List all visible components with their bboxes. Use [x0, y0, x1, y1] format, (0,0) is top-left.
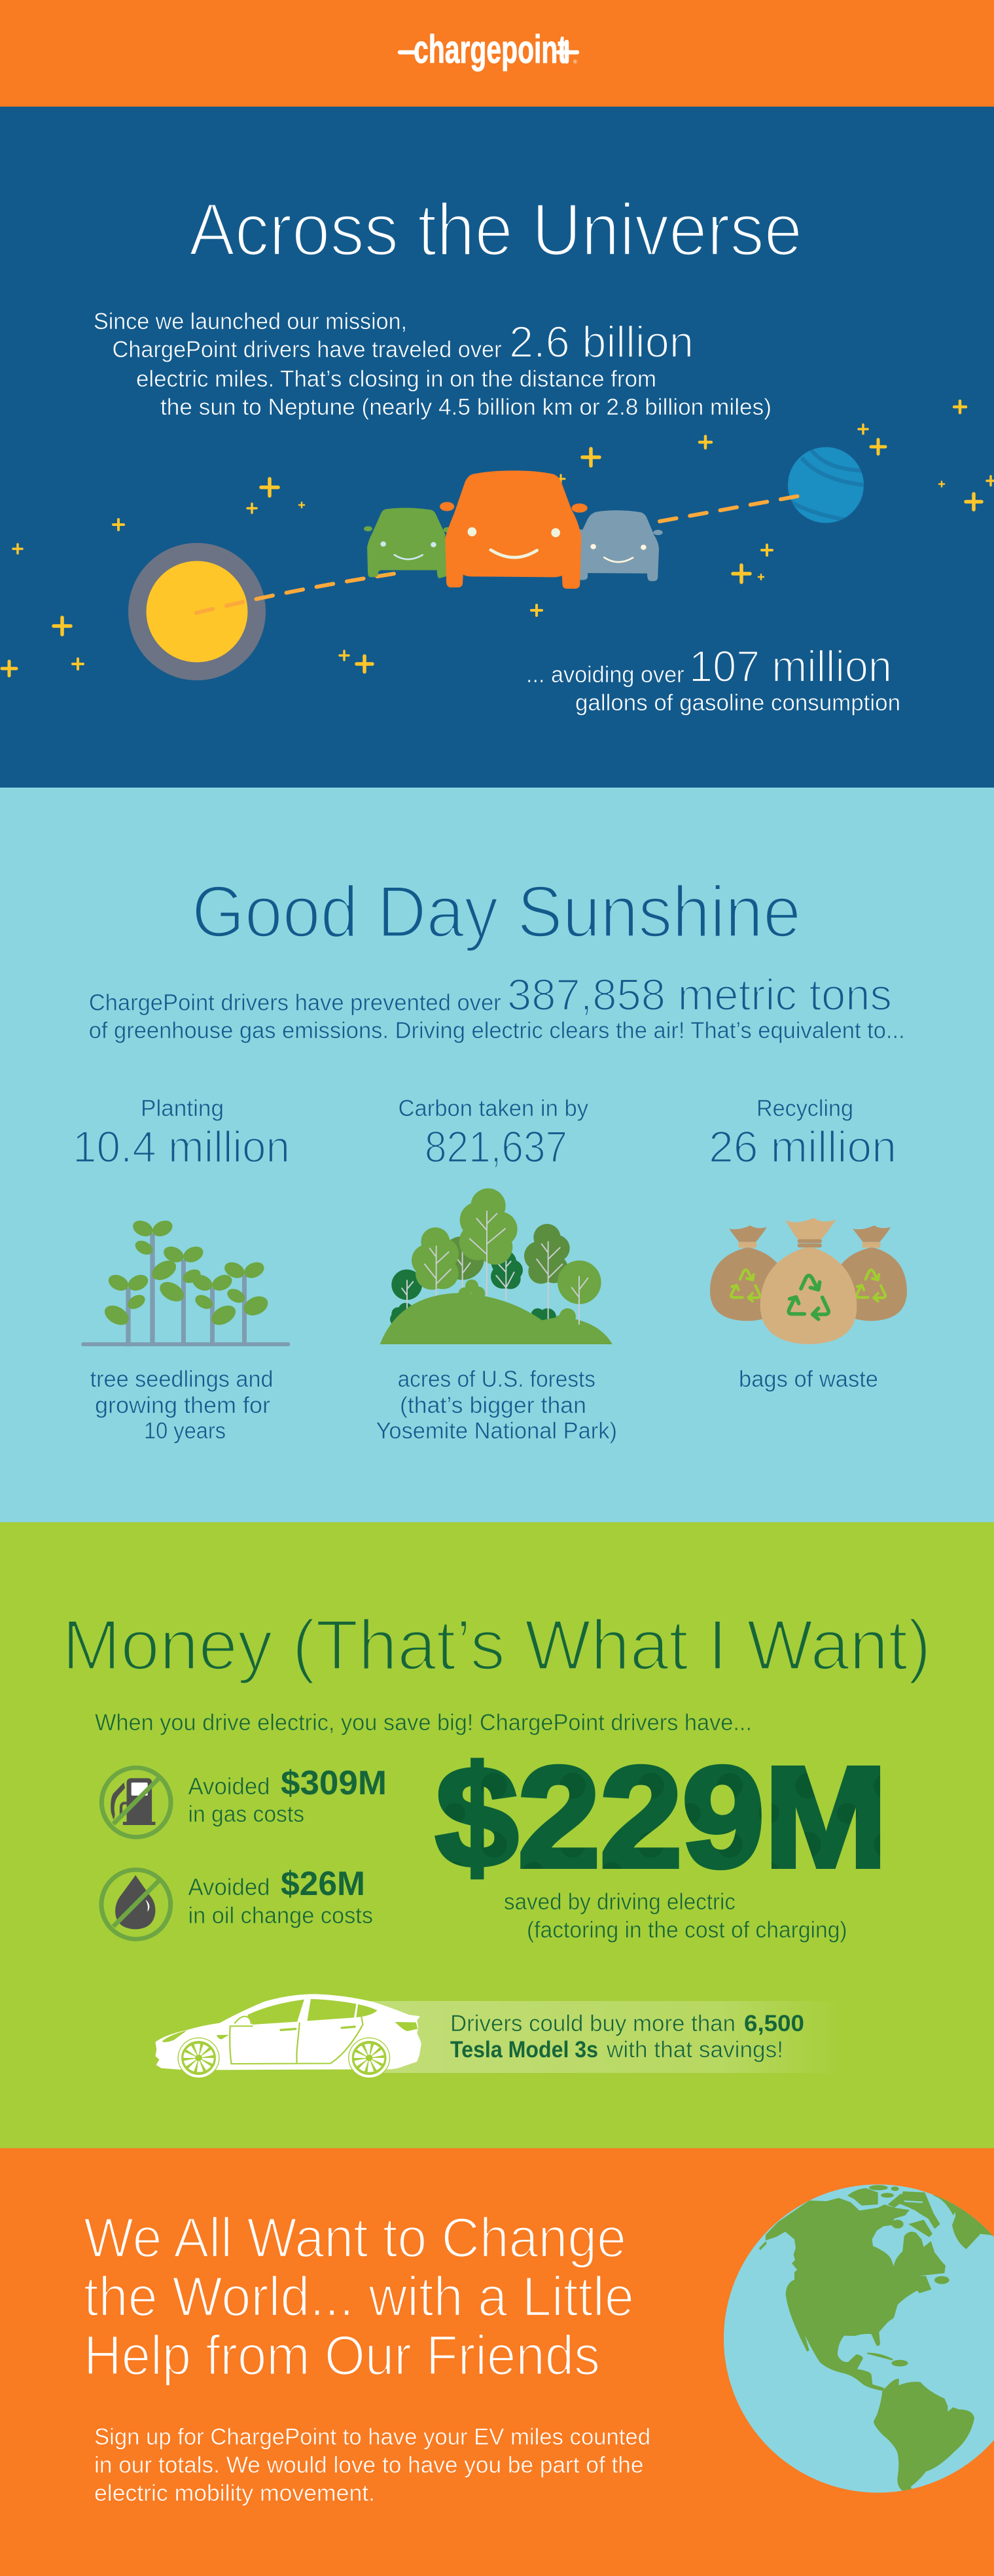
icon: recycling bags	[710, 1218, 907, 1344]
text block: emissions prevented: 387,858 metric tons	[507, 970, 892, 1020]
stat: carbon: Carbon taken in by	[398, 1096, 588, 1121]
text block: savings intro: When you drive electric, you save big! ChargePoint drivers have...	[95, 1710, 752, 1735]
arrow: route from sun to neptune	[196, 496, 800, 613]
stat: oil change costs: $26M	[281, 1865, 365, 1903]
icon: seedlings	[81, 1217, 290, 1346]
stat: recycling: Recycling	[756, 1096, 853, 1121]
caption: tree seedlings	[90, 1366, 274, 1444]
text block: saved by driving electric: saved by driving electric	[504, 1889, 736, 1915]
greenland	[933, 2195, 993, 2249]
icon: no gas pump	[101, 1767, 171, 1837]
caption: tree seedlings: 10 years	[144, 1418, 226, 1444]
icon: globe	[724, 2184, 994, 2493]
stat: recycling: 26 million	[709, 1123, 896, 1172]
heading: across the universe: Across the Universe	[189, 188, 802, 271]
caption: forests	[376, 1366, 617, 1444]
callout: tesla banner	[366, 2001, 843, 2073]
heading: money: Money (That’s What I Want)	[62, 1605, 931, 1685]
heading: change the world: Help from Our Friends	[84, 2325, 600, 2387]
icon: green car	[364, 508, 452, 578]
text block: gasoline avoided	[526, 642, 900, 716]
caption: tree seedlings: growing them for	[95, 1393, 270, 1418]
caption: tree seedlings: tree seedlings and	[90, 1366, 274, 1392]
text block: miles traveled: ChargePoint drivers have traveled over	[113, 337, 502, 362]
text block: miles traveled: Since we launched our mission,	[94, 309, 407, 334]
text block: gasoline avoided: gallons of gasoline consumption	[575, 690, 900, 716]
text block: tesla comparison: with that savings!	[606, 2037, 783, 2063]
caption: forests: acres of U.S. forests	[398, 1366, 595, 1392]
icon: no oil drop	[101, 1870, 171, 1939]
icon: neptune	[788, 447, 864, 523]
stat: carbon	[398, 1096, 588, 1172]
heading: change the world	[84, 2207, 634, 2387]
stat: gas costs	[188, 1764, 387, 1827]
caption: forests: (that’s bigger than	[400, 1393, 586, 1418]
panel: change the world	[85, 2184, 994, 2505]
text block: miles traveled: the sun to Neptune (nearly 4.5 billion km or 2.8 billion miles)	[160, 394, 772, 420]
caribbean	[867, 2353, 908, 2367]
big number: 229M: $229M	[436, 1738, 887, 1897]
center bag	[760, 1218, 857, 1344]
stat: oil change costs: in oil change costs	[188, 1903, 373, 1928]
heading: change the world: the World... with a Little	[84, 2266, 634, 2328]
wheel	[348, 2038, 390, 2078]
text block: sign up: in our totals. We would love to have you be part of the	[94, 2452, 644, 2478]
text block: tesla comparison: Drivers could buy more than	[450, 2011, 736, 2036]
stat: gas costs: in gas costs	[188, 1801, 304, 1827]
stat: gas costs: $309M	[281, 1764, 387, 1802]
stat: oil change costs	[188, 1865, 373, 1928]
stat: gas costs: Avoided	[188, 1773, 270, 1800]
text block: emissions prevented	[89, 970, 905, 1043]
icon: forest	[380, 1189, 612, 1344]
icon: orange car	[440, 470, 588, 589]
heading: change the world: We All Want to Change	[84, 2207, 626, 2269]
stat: oil change costs: Avoided	[188, 1873, 270, 1900]
panel: header	[0, 0, 994, 107]
logo: chargepoint	[400, 27, 577, 71]
caption: forests: Yosemite National Park)	[376, 1418, 617, 1444]
logo: chargepoint: chargepoint	[414, 27, 567, 71]
text block: sign up: Sign up for ChargePoint to have your EV miles counted	[94, 2424, 650, 2450]
text block: emissions prevented: of greenhouse gas emissions. Driving electric clears the air! That’s equivalent to...	[89, 1018, 905, 1043]
south america	[874, 2378, 974, 2491]
text block: sign up: electric mobility movement.	[94, 2480, 375, 2506]
left bag	[710, 1225, 787, 1321]
panel: across the universe	[0, 107, 994, 788]
text block: saved by driving electric: (factoring in the cost of charging)	[527, 1917, 847, 1943]
stat: planting	[73, 1096, 290, 1172]
stat: carbon: 821,637	[425, 1123, 567, 1172]
caption: bags of waste: bags of waste	[739, 1366, 878, 1392]
arctic islands	[847, 2185, 950, 2284]
text block: gasoline avoided: ... avoiding over	[526, 662, 684, 688]
text block: emissions prevented: ChargePoint drivers have prevented over	[89, 990, 501, 1015]
text block: sign up	[94, 2424, 650, 2506]
text block: tesla comparison: Tesla Model 3s	[450, 2037, 598, 2063]
logo: chargepoint: ®	[573, 59, 577, 65]
text block: gasoline avoided: 107 million	[689, 642, 892, 691]
icon: white car	[155, 1994, 421, 2078]
stat: planting: 10.4 million	[73, 1123, 290, 1172]
north america	[759, 2198, 946, 2391]
panel: good day sunshine	[0, 788, 994, 1522]
icon: smiling cars	[364, 470, 663, 589]
text block: tesla comparison: 6,500	[744, 2011, 804, 2036]
text block: tesla comparison	[450, 2011, 804, 2063]
heading: good day sunshine: Good Day Sunshine	[192, 871, 801, 952]
text block: miles traveled: electric miles. That’s closing in on the distance from	[136, 366, 656, 392]
text block: saved by driving electric	[504, 1889, 847, 1943]
icon: sun	[128, 543, 266, 680]
stat: recycling	[709, 1096, 896, 1172]
wheel	[177, 2038, 220, 2078]
text block: miles traveled	[94, 309, 772, 420]
stars	[2, 401, 994, 676]
icon: gray car	[577, 510, 663, 581]
right bag	[833, 1225, 907, 1321]
panel: money	[0, 1522, 994, 2148]
stat: planting: Planting	[141, 1096, 224, 1121]
text block: miles traveled: 2.6 billion	[509, 317, 694, 367]
